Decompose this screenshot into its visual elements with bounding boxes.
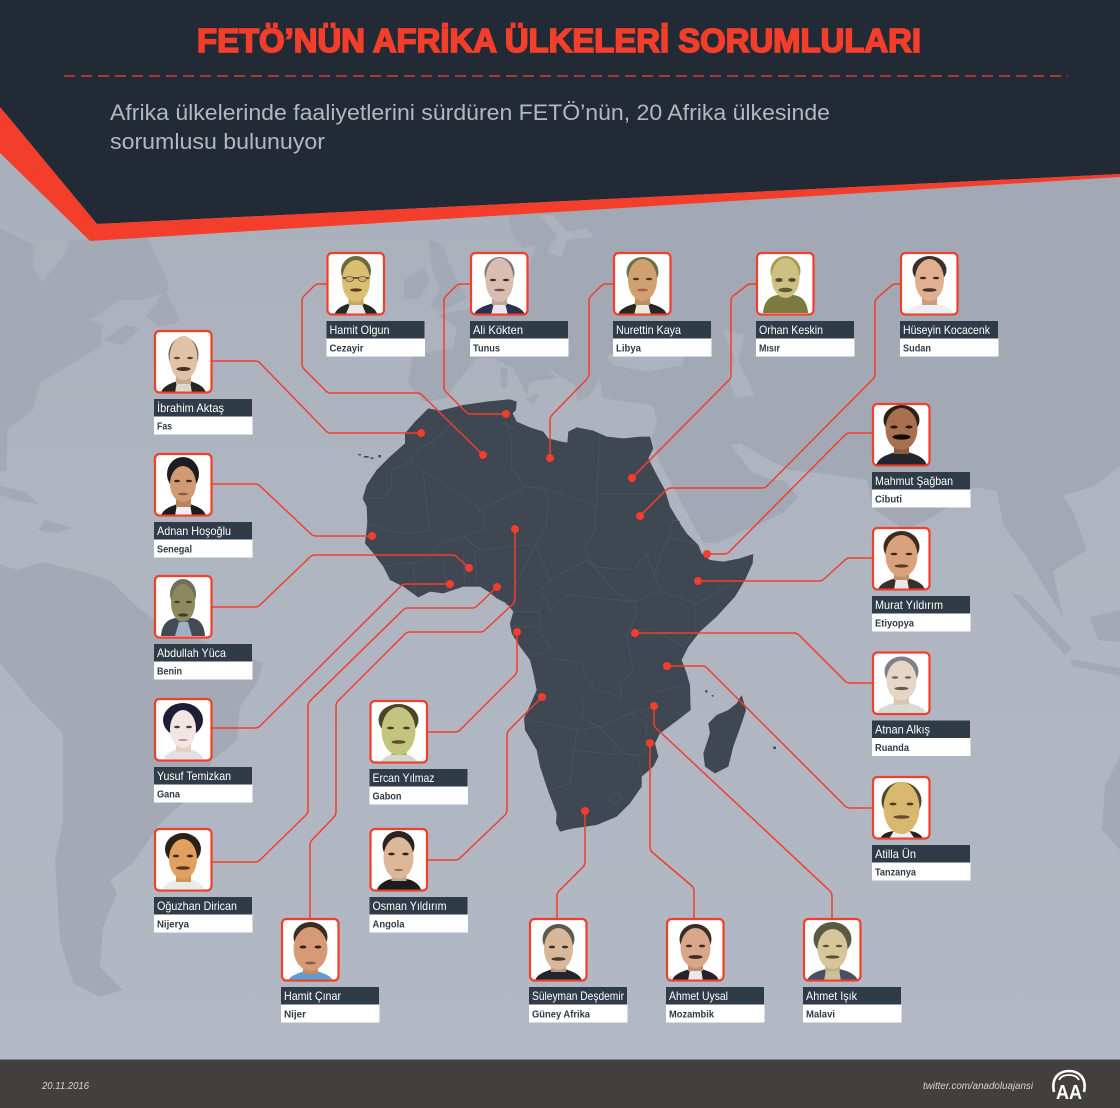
land: Nova Scotia [103, 325, 140, 345]
card: Hamit Olgun, Cezayir: Cezayir [330, 344, 364, 354]
card: Nurettin Kaya, Libya [613, 253, 712, 356]
card: Orhan Keskin, Mısır: Orhan Keskin [759, 323, 823, 337]
card: Mahmut Şağban, Cibuti: Cibuti [875, 494, 902, 506]
card: Abdullah Yüca, Benin [154, 576, 252, 680]
card: Adnan Hoşoğlu, Senegal [154, 454, 252, 558]
map: Madagascar [703, 695, 746, 773]
land: Australia [1102, 756, 1120, 850]
card: Abdullah Yüca, Benin: Benin [157, 666, 182, 678]
card: Nurettin Kaya, Libya: Libya [616, 344, 641, 354]
card: Ahmet Işık, Malavi: Malavi [806, 1010, 835, 1020]
land: Southeast Asia islands [1010, 592, 1120, 676]
land: Newfoundland [146, 290, 180, 327]
footer bar [0, 1059, 1120, 1108]
red header band [0, 107, 1120, 241]
card: Hüseyin Kocacenk, Sudan: Sudan [903, 344, 931, 354]
subtitle: Afrika ülkelerinde faaliyetlerini sürdüren FETÖ’nün, 20 Afrika ülkesinde [110, 100, 830, 125]
card: Orhan Keskin, Mısır [756, 253, 854, 356]
card: Yusuf Temizkan, Gana: Gana [157, 790, 180, 800]
card: Abdullah Yüca, Benin: Abdullah Yüca [157, 646, 226, 660]
card: Murat Yıldırım, Etiyopya: Murat Yıldırım [875, 598, 943, 612]
footer date: 20.11.2016 [41, 1080, 89, 1092]
card: Ahmet Uysal, Mozambik: Mozambik [669, 1010, 714, 1020]
card: İbrahim Aktaş, Fas: Fas [157, 422, 172, 432]
land: South America [0, 562, 263, 997]
water: Black Sea [607, 346, 683, 372]
card: İbrahim Aktaş, Fas [154, 331, 252, 434]
card: Ahmet Işık, Malavi: Ahmet Işık [806, 989, 858, 1003]
card: Osman Yıldırım, Angola [370, 829, 468, 932]
card: Hüseyin Kocacenk, Sudan: Hüseyin Kocacenk [903, 323, 991, 337]
card: Hüseyin Kocacenk, Sudan [900, 253, 998, 356]
card: Süleyman Deşdemir, Güney Afrika: Süleyman Deşdemir [532, 989, 624, 1003]
card: Atnan Alkış, Ruanda [872, 652, 970, 756]
card: Atilla Ün, Tanzanya: Tanzanya [875, 868, 916, 878]
card: Ali Kökten, Tunus: Ali Kökten [473, 323, 523, 337]
card: Osman Yıldırım, Angola: Osman Yıldırım [372, 899, 446, 913]
water: Baltic Sea [540, 215, 593, 257]
water: Caspian Sea [723, 330, 755, 398]
land: Sicily and Sardinia [500, 368, 540, 405]
land: North America [0, 228, 170, 472]
card: Hamit Çınar, Nijer: Nijer [284, 1010, 306, 1020]
card: Ercan Yılmaz, Gabon: Gabon [372, 792, 402, 802]
card: Hamit Çınar, Nijer: Hamit Çınar [284, 989, 341, 1003]
card: Nurettin Kaya, Libya: Nurettin Kaya [616, 323, 681, 337]
card: Oğuzhan Dirican, Nijerya: Oğuzhan Dirican [157, 899, 237, 913]
subtitle: sorumlusu bulunuyor [110, 129, 326, 154]
map: country borders [363, 420, 737, 804]
map: islands [358, 454, 776, 749]
icon: AA logo: AA [1056, 1082, 1082, 1104]
card: Murat Yıldırım, Etiyopya [872, 528, 970, 632]
card: Yusuf Temizkan, Gana: Yusuf Temizkan [157, 769, 231, 783]
map: Africa [358, 399, 776, 832]
card: Orhan Keskin, Mısır: Mısır [759, 344, 780, 354]
card: Osman Yıldırım, Angola: Angola [372, 920, 405, 930]
card: Atnan Alkış, Ruanda: Ruanda [875, 743, 909, 754]
card: Ercan Yılmaz, Gabon: Ercan Yılmaz [372, 771, 434, 785]
card: Ahmet Uysal, Mozambik [666, 919, 764, 1022]
card: Adnan Hoşoğlu, Senegal: Senegal [157, 544, 192, 556]
card: Yusuf Temizkan, Gana [154, 699, 252, 802]
card: Süleyman Deşdemir, Güney Afrika [529, 919, 628, 1022]
header panel [0, 0, 1120, 241]
card: Oğuzhan Dirican, Nijerya [154, 829, 252, 932]
card: Hamit Çınar, Nijer [281, 919, 380, 1022]
card: Oğuzhan Dirican, Nijerya: Nijerya [157, 920, 189, 930]
footer social handle: twitter.com/anadoluajansi [923, 1080, 1034, 1092]
card: Atnan Alkış, Ruanda: Atnan Alkış [875, 722, 930, 736]
card: Ali Kökten, Tunus: Tunus [473, 344, 500, 354]
card: Atilla Ün, Tanzanya [872, 777, 970, 880]
card: Ercan Yılmaz, Gabon [370, 701, 468, 804]
card: Mahmut Şağban, Cibuti: Mahmut Şağban [875, 474, 953, 488]
card: Adnan Hoşoğlu, Senegal: Adnan Hoşoğlu [157, 524, 231, 538]
card: Mahmut Şağban, Cibuti [872, 404, 970, 508]
card: Ahmet Uysal, Mozambik: Ahmet Uysal [669, 989, 728, 1003]
land: Europe and Asia [408, 170, 1120, 617]
subtitle [110, 100, 830, 154]
card: Murat Yıldırım, Etiyopya: Etiyopya [875, 618, 914, 630]
card: Süleyman Deşdemir, Güney Afrika: Güney Afrika [532, 1010, 590, 1020]
card: Ahmet Işık, Malavi [803, 919, 902, 1022]
land: Caribbean [0, 486, 72, 533]
title: FETÖ’NÜN AFRİKA ÜLKELERİ SORUMLULARI [197, 22, 921, 59]
card: İbrahim Aktaş, Fas: İbrahim Aktaş [157, 401, 224, 415]
land: UK and Ireland [404, 238, 467, 312]
card: Ali Kökten, Tunus [470, 253, 568, 356]
card: Hamit Olgun, Cezayir [326, 253, 425, 356]
card: Hamit Olgun, Cezayir: Hamit Olgun [330, 323, 390, 337]
icon: AA logo [1053, 1071, 1085, 1104]
location dots [368, 410, 711, 815]
connector lines [212, 284, 901, 919]
card: Atilla Ün, Tanzanya: Atilla Ün [875, 847, 916, 861]
